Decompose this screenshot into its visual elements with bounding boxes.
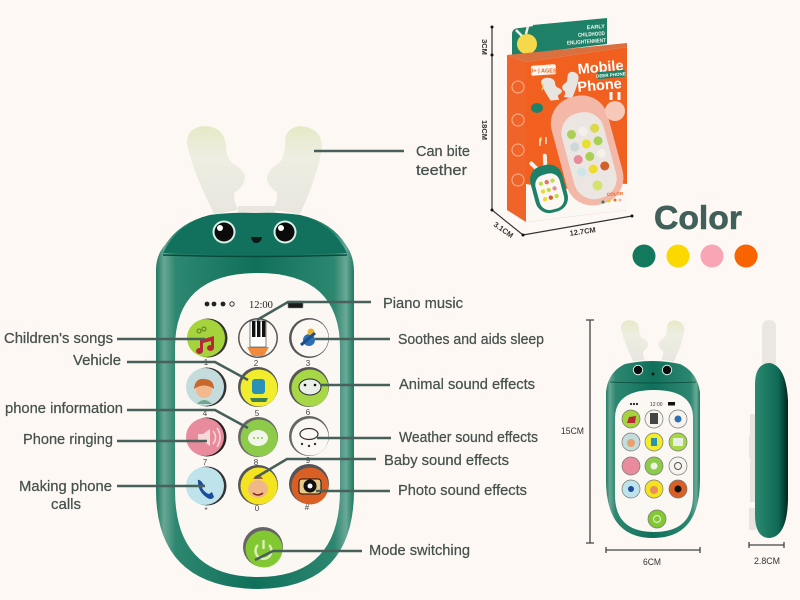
front view dimensions: 15CM: [561, 426, 584, 436]
green phone on box: [525, 153, 571, 216]
callout: baby sound effects: [255, 452, 509, 478]
box dimensions: 12.7CM: [569, 225, 596, 238]
box top flap: [533, 18, 607, 53]
box colour legend: [602, 191, 624, 204]
callout: making phone calls: calls: [51, 496, 81, 513]
age badge: 3+ | AGES: [530, 68, 557, 74]
callout: mode switching: Mode switching: [369, 542, 470, 559]
keypad digits: #: [305, 503, 310, 512]
callout: baby sound effects: Baby sound effects: [384, 452, 509, 469]
small status bar: [630, 402, 675, 408]
button: piano music: [238, 318, 278, 358]
box front face: [526, 47, 627, 222]
button: vehicle: [238, 367, 278, 407]
callout: animal sound effects: Animal sound effects: [399, 376, 535, 393]
keypad digits: 9: [306, 456, 311, 465]
flap text: ENLIGHTENMENT: [567, 38, 607, 47]
callout: making phone calls: Making phone: [19, 478, 112, 495]
button: speaker: [186, 418, 226, 456]
callout: weather sound effects: Weather sound effects: [399, 429, 538, 446]
callout: piano music: [257, 295, 463, 320]
callout: vehicle: Vehicle: [73, 352, 121, 369]
box top edge: [507, 43, 627, 62]
keypad digits: 3: [306, 359, 311, 368]
main phone toy: [156, 126, 354, 589]
small buttons: [622, 410, 687, 528]
keypad digits: 8: [254, 458, 259, 467]
front view dimensions: 6CM: [643, 557, 661, 567]
age badge: [530, 64, 557, 76]
phone screen panel: [175, 273, 340, 577]
side view dimensions: 2.8CM: [754, 556, 780, 566]
box side face: [507, 55, 526, 222]
box title: [577, 58, 624, 96]
keypad digits: 1: [204, 358, 209, 367]
keypad digits: *: [204, 506, 208, 515]
flap text: [567, 24, 607, 47]
side keys: [749, 414, 756, 530]
callout: children's songs: Children's songs: [4, 330, 113, 347]
callout: photo sound effects: Photo sound effects: [398, 482, 527, 499]
callout: phone ringing: Phone ringing: [23, 431, 113, 448]
phone top cap: [163, 213, 347, 256]
box dimensions: 18CM: [480, 120, 489, 140]
callout: mode switching: [255, 542, 470, 560]
front view phone: [606, 320, 700, 538]
front view dimensions: [561, 320, 700, 567]
side view dimensions: [749, 542, 784, 566]
small body: [606, 361, 700, 538]
callout: vehicle: [73, 352, 248, 380]
small screen: [615, 390, 693, 532]
phone body: [156, 213, 354, 589]
side teether: [762, 320, 776, 364]
box antlers: [541, 72, 579, 101]
callout: can bite teether: Can bite: [416, 143, 470, 160]
status bar: 12:00: [249, 300, 273, 311]
flap text: EARLY: [587, 24, 605, 31]
box dimensions: 3CM: [480, 39, 489, 55]
box dimensions: 3.1CM: [492, 220, 515, 240]
box white base: [526, 182, 627, 222]
keypad digits: 0: [255, 504, 260, 513]
small face: [633, 365, 672, 376]
callout: piano music: Piano music: [383, 295, 463, 312]
colour options: [632, 199, 758, 268]
callout: making phone calls: [19, 478, 205, 513]
status bar: [205, 300, 303, 311]
button: animal: [289, 367, 329, 407]
callout: soothes and aids sleep: Soothes and aids sleep: [398, 331, 544, 348]
packaging box: [507, 18, 630, 222]
keypad digits: [203, 358, 311, 515]
button: phone call: [186, 466, 226, 506]
mini mascot badge: [605, 92, 625, 121]
button: mode switching: [243, 527, 283, 568]
button: message: [238, 417, 278, 457]
box title: Phone: [577, 76, 622, 96]
deer phone tag: DEER PHONE: [596, 71, 626, 79]
small status bar: 12:00: [650, 402, 663, 408]
icon: teether antlers: [187, 126, 322, 216]
keypad digits: 4: [203, 409, 208, 418]
callout: can bite teether: teether: [416, 162, 467, 179]
keypad digits: 2: [254, 359, 259, 368]
side body: [755, 363, 788, 538]
button: children's songs: [187, 318, 228, 358]
button: face: [186, 368, 226, 406]
button: camera: [289, 464, 329, 504]
side view phone: [749, 320, 788, 538]
callout: phone information: [5, 400, 248, 428]
box title: Mobile: [577, 58, 624, 78]
box colour legend: COLOR: [607, 191, 624, 197]
callout: can bite teether: [314, 143, 470, 179]
heading: color: Color: [654, 199, 742, 236]
keypad digits: 6: [306, 408, 311, 417]
keypad digits: 5: [255, 409, 260, 418]
button: soothes: [289, 318, 329, 358]
side icons: [512, 81, 524, 186]
callout: phone information: phone information: [5, 400, 123, 417]
pink phone on box: [545, 89, 630, 212]
keypad buttons: [186, 318, 329, 568]
box dimensions: [480, 26, 634, 240]
colour swatches: [632, 244, 758, 268]
flap text: CHILDHOOD: [578, 31, 605, 39]
speech and music icons: [531, 84, 546, 146]
button: baby: [238, 465, 278, 505]
keypad digits: 7: [203, 458, 208, 467]
small antlers: [621, 320, 684, 362]
button: weather: [289, 416, 329, 456]
small icons: [627, 413, 683, 522]
face: eyes and nose: [212, 220, 296, 244]
flap mascot tab: [512, 26, 537, 56]
